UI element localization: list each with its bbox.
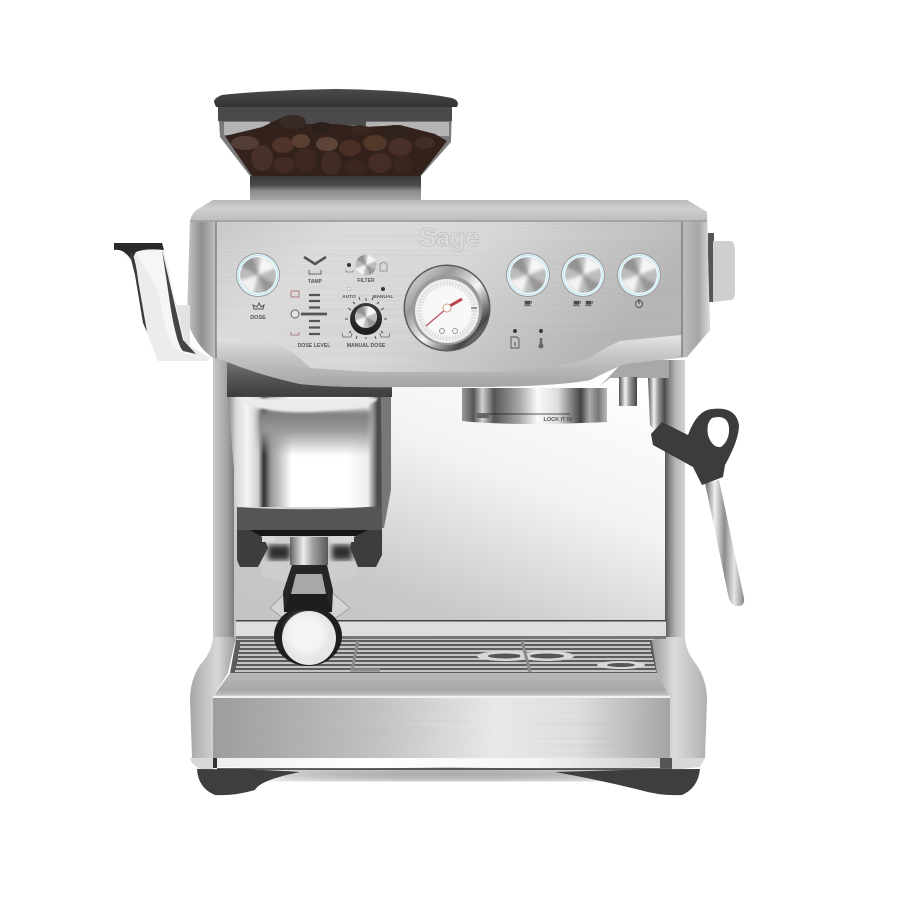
right foot bbox=[555, 769, 700, 795]
filter switch bbox=[346, 253, 387, 284]
auto manual labels bbox=[342, 287, 393, 300]
basket shading bbox=[268, 545, 352, 560]
chrome strip bbox=[217, 758, 672, 768]
back bar bbox=[236, 620, 666, 638]
rack cup rests bbox=[352, 641, 645, 672]
drip tray base bbox=[190, 620, 707, 770]
front panel bbox=[216, 222, 682, 372]
dose level scale: DOSE LEVEL bbox=[298, 343, 331, 349]
brushed metal texture bbox=[216, 222, 682, 372]
right column bbox=[665, 360, 685, 650]
bean chute bbox=[228, 397, 391, 528]
group head bbox=[462, 388, 607, 424]
auto manual labels: AUTO bbox=[342, 294, 356, 300]
right fork arm bbox=[350, 530, 382, 567]
left column bbox=[213, 355, 234, 640]
steam wand tube bbox=[705, 480, 744, 606]
dose button bbox=[236, 253, 280, 321]
manual dose knob: MANUAL DOSE bbox=[347, 343, 386, 349]
drip tray rack bbox=[230, 640, 657, 673]
right flare bbox=[652, 637, 707, 758]
left side panel bbox=[187, 222, 216, 358]
hopper bowl bbox=[218, 104, 452, 176]
bracket under head bbox=[600, 360, 669, 386]
underside shadow of head bbox=[227, 350, 392, 397]
filter switch: FILTER bbox=[357, 278, 375, 284]
grinder collar and fork bbox=[237, 506, 382, 567]
top band bbox=[190, 200, 707, 221]
steam wand rubber grip bbox=[651, 409, 739, 485]
left flare bbox=[190, 637, 236, 758]
right side panel bbox=[682, 222, 710, 357]
power button bbox=[617, 253, 661, 308]
chrome clips bbox=[262, 536, 354, 542]
small spouts bbox=[619, 377, 637, 406]
steam wand bbox=[651, 409, 744, 606]
water tank cap bbox=[708, 233, 735, 302]
two cup button bbox=[561, 253, 605, 306]
basket bbox=[261, 535, 357, 582]
spout column bbox=[290, 537, 328, 565]
lock label: LOCK IT IN bbox=[543, 417, 573, 423]
tray top slope bbox=[213, 673, 670, 697]
one cup button bbox=[506, 253, 550, 306]
dose icon bbox=[253, 303, 264, 309]
portafilter bbox=[261, 535, 357, 622]
dose level scale bbox=[291, 291, 331, 349]
spout fins bbox=[270, 590, 350, 622]
head silhouette bbox=[187, 200, 710, 387]
left chrome corner bbox=[190, 758, 213, 770]
neck bbox=[283, 565, 333, 612]
manual dose knob bbox=[342, 297, 390, 349]
portafilter handle knob bbox=[274, 606, 342, 666]
gauge needle bbox=[426, 309, 446, 326]
status light: clean bbox=[511, 329, 519, 348]
left fork arm bbox=[237, 530, 268, 567]
lower lip bbox=[216, 335, 682, 387]
status light: temperature bbox=[538, 329, 544, 348]
hopper inner shadow bbox=[218, 105, 452, 125]
coffee beans bbox=[225, 115, 447, 176]
tray front bbox=[213, 698, 670, 758]
left chrome handle bbox=[114, 243, 209, 361]
floor shadow bbox=[260, 768, 640, 780]
machine head bbox=[187, 200, 710, 387]
dose label: DOSE bbox=[250, 315, 266, 321]
right chrome corner bbox=[672, 758, 705, 770]
tray brushed texture bbox=[213, 698, 670, 758]
steam pipe bbox=[648, 378, 665, 432]
hopper light windows bbox=[224, 122, 449, 136]
bean hopper bbox=[214, 89, 458, 201]
hopper collar bbox=[250, 172, 421, 201]
tamp indicator: TAMP bbox=[308, 279, 323, 285]
left foot bbox=[197, 769, 300, 795]
hopper lid bbox=[214, 89, 458, 107]
brand logo: Sage bbox=[419, 222, 479, 252]
pressure gauge bbox=[404, 264, 490, 352]
auto manual labels: MANUAL bbox=[373, 294, 393, 300]
lower body back panel bbox=[227, 370, 669, 642]
tamp indicator bbox=[304, 257, 326, 285]
